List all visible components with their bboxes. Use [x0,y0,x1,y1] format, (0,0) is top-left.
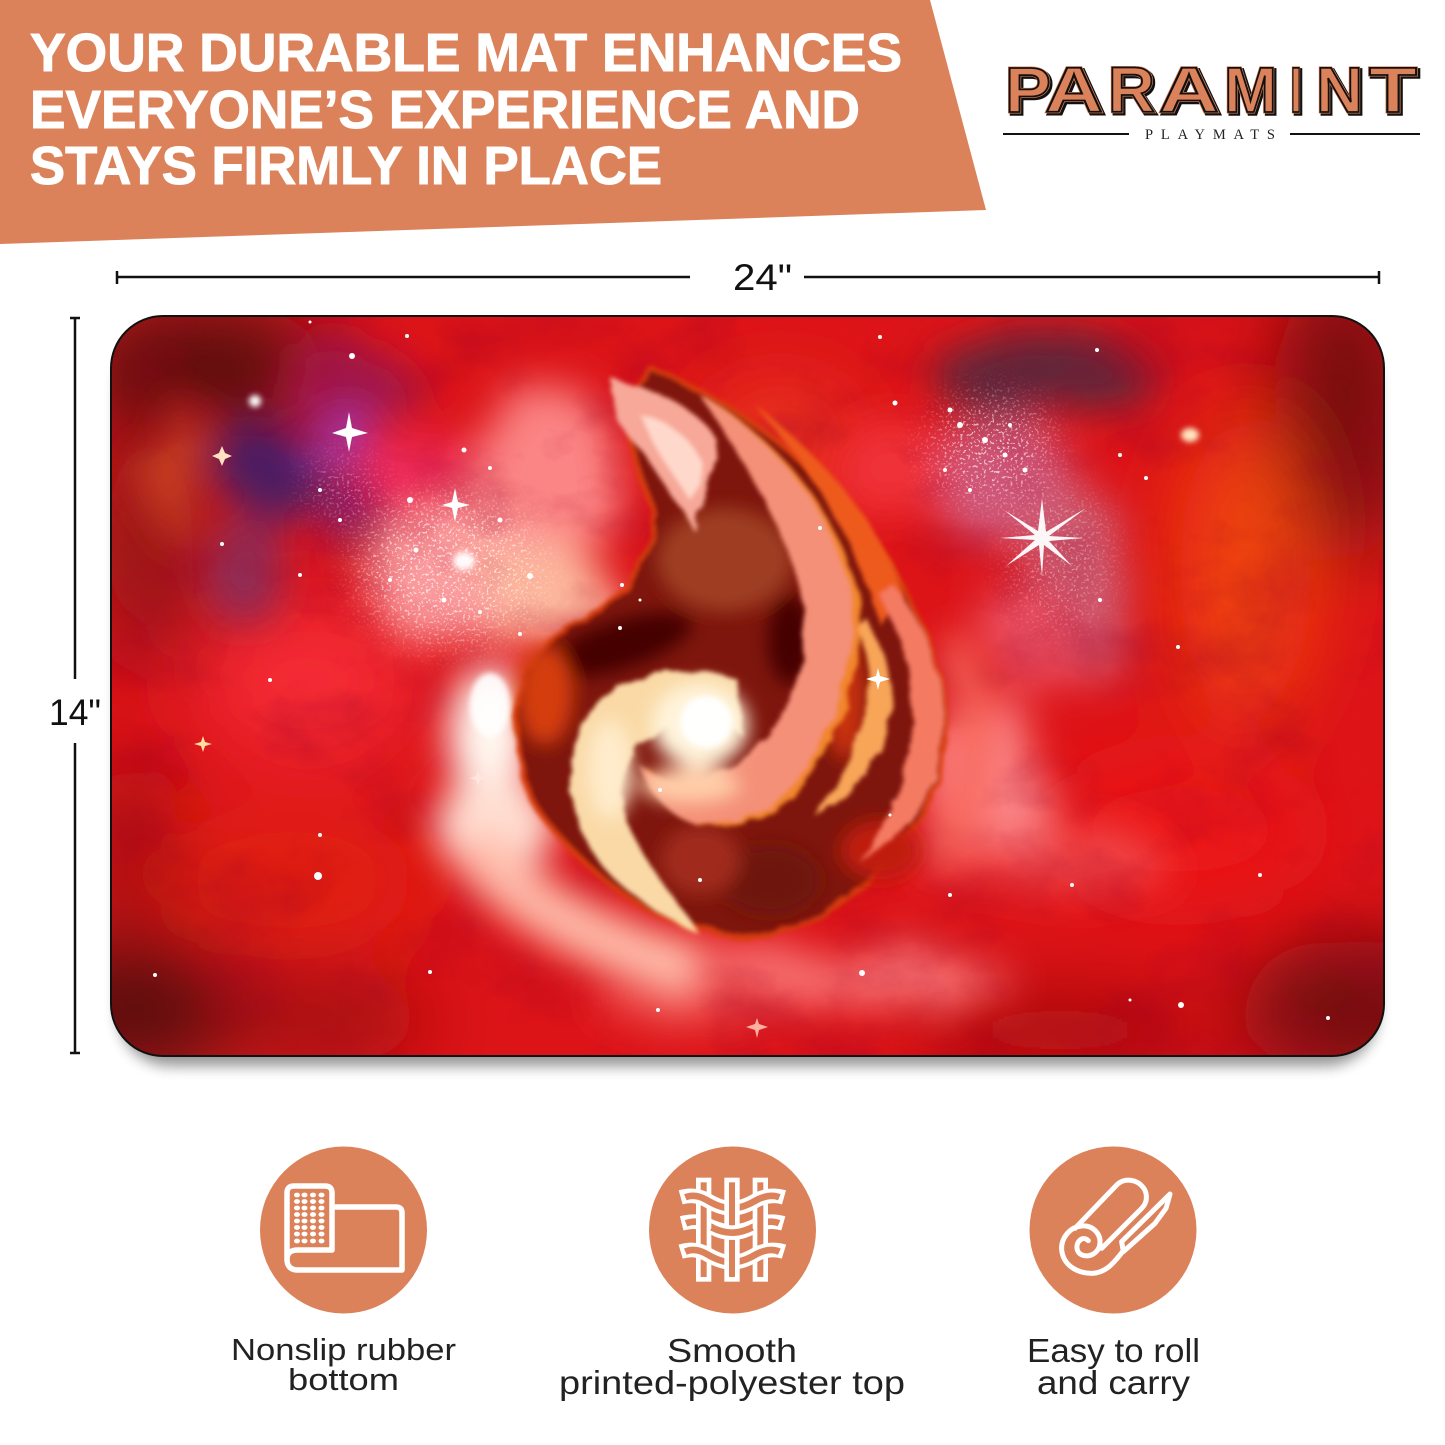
title [30,23,902,196]
logo: Paramint Playmats: M [1226,56,1279,128]
logo: Paramint Playmats: R [1108,54,1155,126]
icon: woven fabric [649,1146,816,1314]
outer orange band [755,405,905,625]
logo: Paramint Playmats: A [1047,56,1105,128]
logo: Paramint Playmats: A [1161,56,1221,128]
cloud texture overlay [111,316,1384,1056]
title: EVERYONE’S EXPERIENCE AND [30,80,860,140]
label: nonslip rubber bottom: bottom [288,1362,399,1397]
logo: Paramint Playmats [1003,54,1420,143]
feature: easy to roll and carry [1027,1146,1200,1401]
galaxy core [588,683,748,820]
top cream plume [610,377,718,530]
logo: Paramint Playmats: A [1159,54,1219,126]
icon: rolled mat [1030,1146,1196,1314]
logo: Paramint Playmats: I [1292,56,1304,128]
logo: Paramint Playmats: T [1369,54,1417,126]
main right arm [646,397,861,826]
height dimension: 14 inches: 14" [49,692,101,733]
label: easy to roll and carry [1027,1332,1200,1401]
label: easy to roll and carry: Easy to roll [1027,1332,1200,1369]
second arm [815,618,892,816]
logo: Paramint Playmats: R [1110,56,1157,128]
mat shadow [118,334,1378,1066]
logo: Paramint Playmats: M [1224,54,1277,126]
height dimension: 14 inches [49,318,101,1053]
cream and orange swirl arms [571,377,944,935]
feature: nonslip rubber bottom [231,1146,456,1397]
broad nebula colour clouds [112,317,1383,1055]
logo: Paramint Playmats: P [1007,56,1053,128]
dark central vortex [516,368,945,935]
logo: Paramint Playmats: A [1045,54,1103,126]
logo: Paramint Playmats: N [1318,56,1365,128]
logo: Paramint Playmats: M [1224,54,1277,126]
logo: Paramint Playmats: A [1045,54,1103,126]
playmat artwork: red nebula with central spiral [20,260,1445,1080]
label: smooth printed-polyester top: Smooth [667,1332,797,1369]
title: STAYS FIRMLY IN PLACE [30,136,662,196]
logo: Paramint Playmats: P [1005,54,1051,126]
logo: Paramint Playmats: N [1316,54,1363,126]
sparkling stars [153,320,1330,1038]
label: smooth printed-polyester top [559,1332,905,1401]
label: nonslip rubber bottom [231,1332,456,1397]
feature: smooth printed-polyester top [559,1146,905,1401]
title: YOUR DURABLE MAT ENHANCES [30,23,902,83]
lower cream arm [571,670,742,935]
logo: Paramint Playmats: N [1316,54,1363,126]
white glow and pale swoosh left of the core [435,640,975,975]
label: smooth printed-polyester top: printed-polyester top [559,1364,905,1401]
logo: Paramint Playmats: I [1290,54,1302,126]
logo: Paramint Playmats: I [1290,54,1302,126]
logo: Paramint Playmats: PLAYMATS [1145,127,1275,143]
icon: mat with dotted underside [260,1146,427,1314]
logo: Paramint Playmats: T [1371,56,1419,128]
logo: Paramint Playmats: R [1108,54,1155,126]
logo: Paramint Playmats: T [1369,54,1417,126]
label: easy to roll and carry: and carry [1037,1364,1191,1401]
logo: Paramint Playmats: P [1005,54,1051,126]
banner: heading background [0,0,986,244]
width dimension: 24 inches: 24" [733,257,792,298]
pale speckled star clusters [310,400,1110,640]
logo: Paramint Playmats: A [1159,54,1219,126]
width dimension: 24 inches [117,257,1379,298]
label: nonslip rubber bottom: Nonslip rubber [231,1332,456,1367]
